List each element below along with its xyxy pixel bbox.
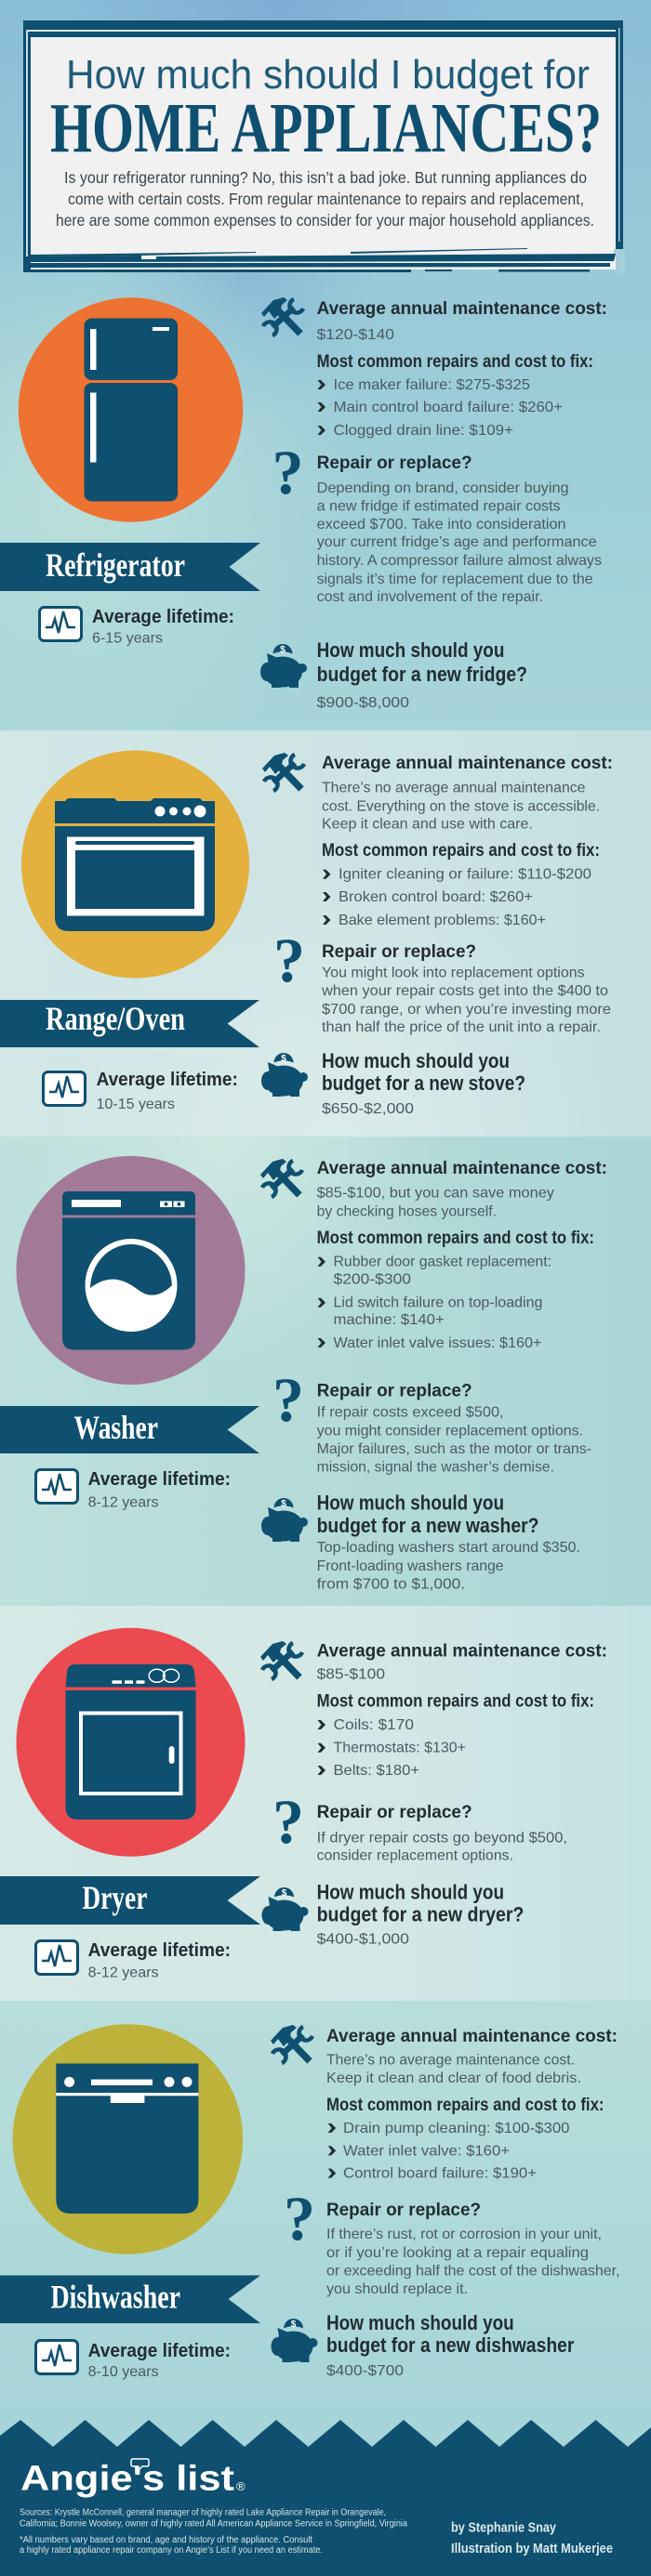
average lifetime [35,2340,231,2380]
common repairs: machine: $140+ [333,1312,445,1328]
budget for a new stove: budget for a new stove? [322,1071,525,1095]
budget for a new dishwasher: budget for a new dishwasher [326,2333,575,2357]
budget for a new dryer [317,1880,524,1948]
budget for a new fridge: $900-$8,000 [317,695,409,711]
common repairs: Ice maker failure: $275-$325 [333,377,530,393]
banner: Dryer [0,1876,260,1925]
common repairs [317,1691,594,1779]
icon: oven in gold circle [21,751,249,978]
banner: Dishwasher [0,2275,260,2323]
repair or replace: mission, signal the washer’s demise. [317,1459,554,1475]
average lifetime: Average lifetime: [88,1469,231,1490]
budget for a new washer: How much should you [317,1491,504,1514]
budget for a new dishwasher: $400-$700 [326,2363,404,2379]
icon: piggy bank [261,1053,308,1097]
common repairs: Most common repairs and cost to fix: [322,840,600,861]
repair or replace: Major failures, such as the motor or trans- [317,1441,591,1457]
maintenance cost: Average annual maintenance cost: [317,1640,607,1661]
intro text [56,168,594,230]
average lifetime: Average lifetime: [92,607,234,627]
banner: Range/Oven: Range/Oven [46,1000,185,1037]
common repairs [326,2095,604,2182]
budget for a new fridge: budget for a new fridge? [317,663,527,686]
maintenance cost: Keep it clean and clear of food debris. [326,2070,581,2086]
intro text: Is your refrigerator running? No, this isn’t a bad joke. But running appliances do [64,168,587,187]
budget for a new fridge [317,638,527,711]
maintenance cost: $85-$100 [317,1667,385,1683]
intro text: here are some common expenses to consider for your major household appliances. [56,211,594,230]
sources: California; Bonnie Woolsey, owner of highly rated All American Appliance Service in Springfield, Virginia [20,2519,407,2530]
panel: footer [0,2420,651,2576]
panel: page header and refrigerator background [0,0,651,731]
budget for a new fridge: How much should you [317,638,504,662]
average lifetime: 6-15 years [92,630,163,647]
logo: Angie's list: Angie's list [20,2459,234,2498]
icon: tools [260,1641,302,1679]
repair or replace: Repair or replace? [317,1802,472,1822]
icon: tools [262,753,304,791]
icon: refrigerator in orange circle [19,297,243,522]
average lifetime: Average lifetime: [97,1070,238,1090]
repair or replace: signals it’s time for replacement due to the [317,572,593,587]
panel: washer [0,1137,651,1606]
common repairs: Most common repairs and cost to fix: [326,2095,604,2115]
intro text: come with certain costs. From regular maintenance to repairs and replacement, [68,190,584,208]
repair or replace [317,1802,567,1864]
panel: title card [23,20,625,273]
average lifetime: Average lifetime: [88,2341,231,2361]
common repairs: Bake element problems: $160+ [339,913,546,928]
maintenance cost: Average annual maintenance cost: [317,1158,607,1178]
credits [451,2520,613,2556]
repair or replace: you should replace it. [326,2281,468,2297]
icon: tools [261,297,303,335]
icon: question mark: ? [272,1786,304,1857]
common repairs: $200-$300 [333,1272,411,1288]
sources: Sources: Krystle McConnell, general manager of highly rated Lake Appliance Repair in Orangevale, [20,2507,386,2518]
maintenance cost: There’s no average annual maintenance [322,780,586,795]
average lifetime [35,1940,231,1980]
budget for a new stove: $650-$2,000 [322,1101,414,1117]
average lifetime [43,1070,238,1112]
icon: piggy bank: $ [291,2320,297,2330]
icon: washer in mauve circle [17,1156,246,1385]
icon: tools [271,2025,312,2063]
repair or replace: Depending on brand, consider buying [317,480,569,496]
icon: piggy bank: $ [281,1054,286,1064]
budget for a new washer: from $700 to $1,000. [317,1576,465,1592]
icon: question mark: ? [284,2183,315,2254]
repair or replace: when your repair costs get into the $400 to [321,983,608,999]
maintenance cost: Average annual maintenance cost: [322,753,613,773]
repair or replace: If repair costs exceed $500, [317,1404,504,1420]
maintenance cost: $120-$140 [317,327,394,343]
repair or replace: consider replacement options. [317,1848,513,1864]
panel: dryer [0,1606,651,2001]
common repairs: Belts: $180+ [333,1763,419,1779]
repair or replace: than half the price of the unit into a repair. [322,1019,601,1035]
banner: Washer: Washer [74,1409,158,1446]
budget for a new dryer: How much should you [317,1880,504,1903]
icon: dishwasher in olive circle [13,2024,243,2254]
repair or replace: Repair or replace? [317,453,472,473]
credits: Illustration by Matt Mukerjee [451,2541,613,2556]
repair or replace: or if you’re looking at a repair equaling [326,2245,589,2261]
banner: Refrigerator [0,543,260,591]
repair or replace: Repair or replace? [317,1381,472,1401]
common repairs: Clogged drain line: $109+ [333,423,513,439]
repair or replace [317,453,602,605]
repair or replace [317,1381,591,1475]
panel: dishwasher [0,2001,651,2447]
banner: Refrigerator: Refrigerator [46,546,185,584]
maintenance cost: Average annual maintenance cost: [317,298,607,319]
sources: *All numbers vary based on brand, age and history of the appliance. Consult [20,2535,312,2545]
maintenance cost: $85-$100, but you can save money [317,1185,554,1201]
banner: Dishwasher: Dishwasher [50,2279,180,2316]
average lifetime: Average lifetime: [88,1940,231,1961]
average lifetime: 10-15 years [97,1097,175,1112]
repair or replace: or exceeding half the cost of the dishwasher, [326,2263,619,2279]
common repairs: Control board failure: $190+ [343,2166,537,2182]
budget for a new stove: How much should you [322,1049,510,1072]
budget for a new dishwasher: How much should you [326,2311,514,2334]
icon: piggy bank: $ [280,645,286,655]
average lifetime: 8-12 years [88,1965,159,1980]
common repairs: Drain pump cleaning: $100-$300 [343,2121,570,2136]
budget for a new washer [317,1491,580,1592]
icon: piggy bank [260,644,307,688]
sources: a highly rated appliance repair company on Angie’s List if you need an estimate. [20,2545,323,2556]
icon: piggy bank [261,1498,308,1542]
title line 1: How much should I budget for [66,52,590,98]
repair or replace: cost and involvement of the repair. [317,589,543,605]
common repairs: Coils: $170 [333,1717,414,1733]
common repairs: Water inlet valve: $160+ [343,2143,510,2159]
panel: range/oven [0,730,651,1137]
average lifetime [39,607,234,647]
maintenance cost: by checking hoses yourself. [317,1203,497,1219]
repair or replace: a new fridge if estimated repair costs [317,498,561,514]
common repairs: Thermostats: $130+ [333,1741,466,1756]
icon: question mark: ? [272,437,303,507]
budget for a new dishwasher [326,2311,575,2379]
maintenance cost [326,2026,618,2086]
common repairs: Igniter cleaning or failure: $110-$200 [339,867,591,883]
repair or replace [321,941,611,1035]
repair or replace: you might consider replacement options. [317,1423,583,1439]
repair or replace: Repair or replace? [322,941,476,962]
common repairs: Broken control board: $260+ [339,889,533,905]
repair or replace: your current fridge’s age and performance [317,534,597,550]
common repairs [322,840,600,928]
banner: Range/Oven [0,1000,259,1047]
repair or replace: You might look into replacement options [322,966,585,981]
icon: piggy bank: $ [281,1499,286,1509]
icon: piggy bank: $ [282,1888,287,1899]
common repairs: Water inlet valve issues: $160+ [333,1335,541,1351]
icon: question mark: ? [273,925,305,995]
icon: piggy bank [272,2319,318,2362]
average lifetime [35,1469,231,1511]
icon: piggy bank [262,1887,309,1931]
repair or replace: Repair or replace? [326,2200,481,2220]
common repairs [317,351,593,439]
common repairs: Most common repairs and cost to fix: [317,351,593,372]
maintenance cost [317,1640,607,1683]
maintenance cost: cost. Everything on the stove is accessible. [322,798,600,814]
repair or replace [326,2200,619,2297]
repair or replace: $700 range, or when you’re investing more [322,1002,611,1018]
common repairs: Rubber door gasket replacement: [333,1255,551,1270]
credits: by Stephanie Snay [451,2520,557,2536]
common repairs: Most common repairs and cost to fix: [317,1228,594,1248]
panel: refrigerator [0,297,607,711]
maintenance cost [317,1158,607,1219]
maintenance cost [322,753,613,833]
budget for a new washer: budget for a new washer? [317,1514,539,1537]
budget for a new stove [322,1049,525,1117]
common repairs: Main control board failure: $260+ [333,400,563,415]
maintenance cost: There’s no average maintenance cost. [326,2052,575,2069]
icon: dryer in red circle [17,1628,246,1857]
banner: Washer [0,1406,259,1453]
icon: question mark: ? [272,1364,304,1435]
maintenance cost [317,298,607,343]
common repairs [317,1228,594,1351]
budget for a new washer: Front-loading washers range [317,1558,504,1574]
common repairs: Most common repairs and cost to fix: [317,1691,594,1712]
repair or replace: exceed $700. Take into consideration [317,517,566,532]
maintenance cost: Average annual maintenance cost: [326,2026,618,2046]
average lifetime: 8-10 years [88,2364,159,2380]
repair or replace: If there’s rust, rot or corrosion in your unit, [326,2227,602,2242]
common repairs: Lid switch failure on top-loading [333,1295,543,1311]
banner: Dryer: Dryer [82,1879,147,1916]
budget for a new washer: Top-loading washers start around $350. [317,1540,580,1556]
sources [20,2507,407,2556]
budget for a new dryer: $400-$1,000 [317,1932,409,1948]
maintenance cost: Keep it clean and use with care. [322,817,533,833]
budget for a new dryer: budget for a new dryer? [317,1902,524,1925]
repair or replace: If dryer repair costs go beyond $500, [317,1830,567,1846]
icon: tools [260,1159,302,1197]
logo: Angie's list: ® [236,2479,246,2493]
average lifetime: 8-12 years [88,1495,159,1511]
repair or replace: history. A compressor failure almost always [317,553,602,569]
